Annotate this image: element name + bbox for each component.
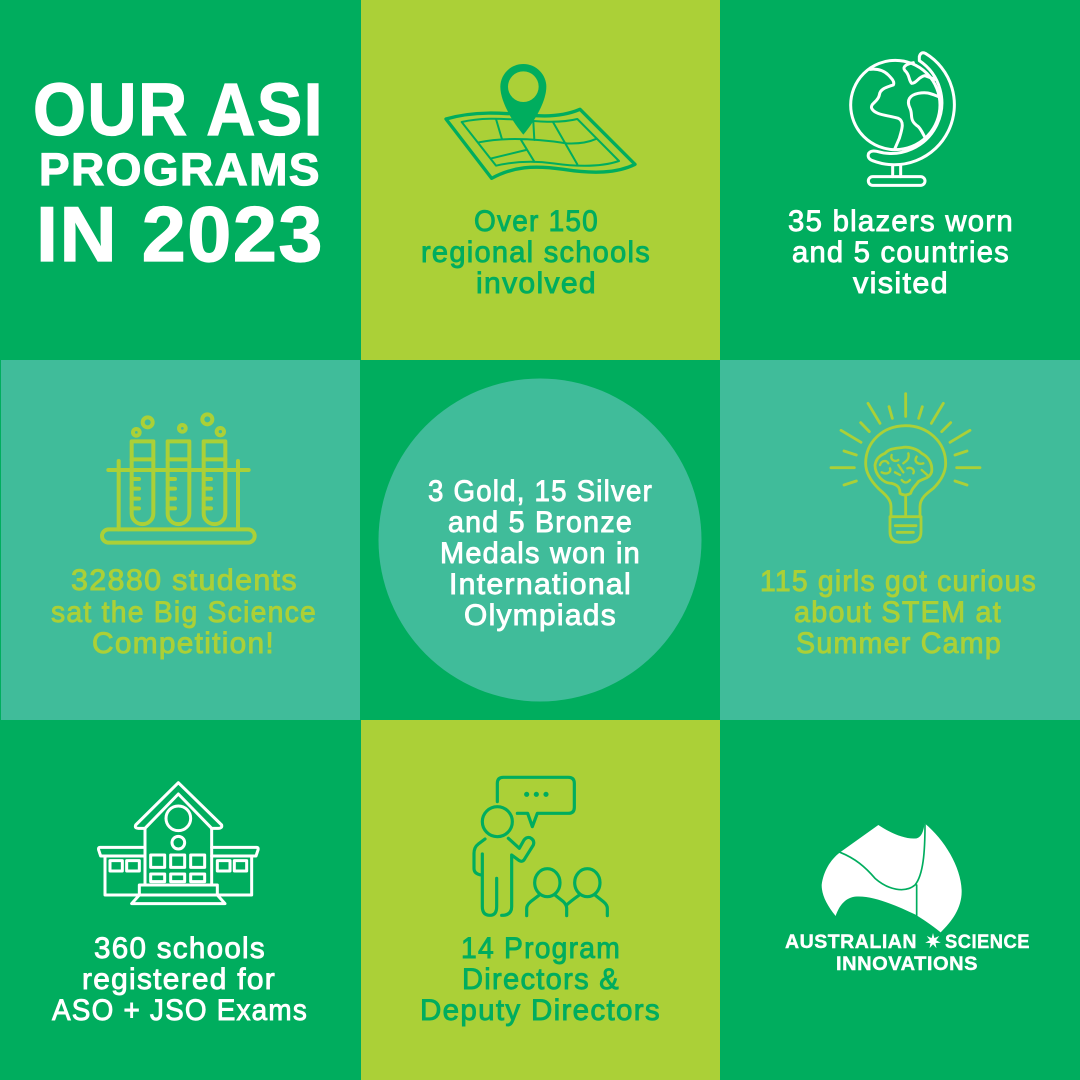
text: olympiad medals: International [449,568,632,601]
text: olympiad medals: 3 Gold, 15 Silver [428,475,653,508]
text: program directors: Deputy Directors [420,994,661,1027]
text: blazers [788,205,1014,300]
text: regional schools: regional schools [421,236,651,269]
text: big science competition: 32880 students [71,564,298,597]
title: IN 2023 [36,190,324,278]
text: olympiad medals: and 5 Bronze [448,506,633,539]
text: blazers: 35 blazers worn [788,205,1014,238]
text: regional schools: Over 150 [474,205,599,238]
panel: presenter tile [361,720,720,1080]
text: summer camp [760,565,1037,660]
icon: test tubes [102,414,255,543]
text: summer camp: 115 girls got curious [760,565,1037,598]
text: exam schools [52,932,308,1027]
title [33,68,324,278]
icon: presenter and audience [474,777,607,916]
text: blazers: and 5 countries [792,236,1010,269]
icon: globe [851,53,954,185]
text: exam schools: 360 schools [94,932,266,965]
text: olympiad medals: Olympiads [464,599,617,632]
logo wordmark [785,932,1030,975]
logo: Australian Science Innovations [785,823,1030,975]
text: exam schools: ASO + JSO Exams [52,994,308,1027]
text: big science competition: Competition! [92,627,275,660]
logo star [925,933,941,948]
text: program directors: 14 Program [461,932,621,965]
panel: map tile [361,0,720,360]
title: PROGRAMS [39,144,321,195]
text: olympiad medals: Medals won in [440,537,641,570]
panel: test tubes tile [1,360,360,720]
text: program directors [420,932,661,1027]
icon: light bulb with brain [831,394,980,542]
icon: school building [98,783,258,904]
text: big science competition: sat the Big Science [51,596,317,629]
panel: light bulb tile [720,360,1080,720]
text: regional schools: involved [476,267,597,300]
icon: map with pin [446,64,635,178]
logo wordmark: AUSTRALIAN [785,932,917,953]
text: exam schools: registered for [82,963,276,996]
text: regional schools [421,205,651,300]
title: OUR ASI [33,68,324,151]
text: program directors: Directors & [462,963,620,996]
text: big science competition [51,564,317,660]
logo wordmark: INNOVATIONS [836,954,978,975]
text: summer camp: about STEM at [794,596,1002,629]
text: olympiad medals [428,475,653,632]
text: blazers: visited [853,267,949,300]
center circle [378,378,702,702]
logo wordmark: SCIENCE [945,932,1030,953]
logo mark: Australia map [822,823,962,932]
text: summer camp: Summer Camp [796,627,1002,660]
